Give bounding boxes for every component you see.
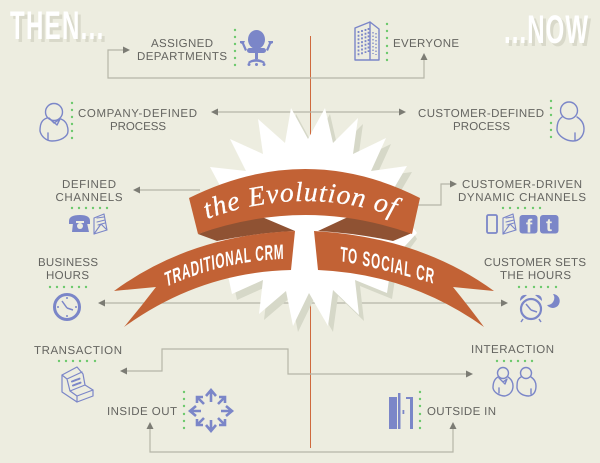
label: inside out: INSIDE OUT (107, 406, 177, 418)
dots (419, 391, 421, 429)
dots row (71, 207, 108, 209)
dots row (518, 286, 557, 288)
label: business hours: HOURS (46, 270, 89, 282)
arrow: defined channels (133, 186, 200, 194)
label: customer-driven dynamic channels: DYNAMIC CHANNELS (458, 192, 586, 204)
arrow: transaction to interaction (120, 349, 473, 378)
icon: facebook: f (526, 216, 533, 238)
starburst shadow (215, 114, 417, 332)
icon: cash register (62, 367, 93, 402)
icon: arrows outward (190, 390, 232, 431)
ribbon lower right (314, 231, 494, 327)
arrow: inside out to outside in (146, 422, 456, 452)
label: assigned departments: DEPARTMENTS (137, 51, 227, 63)
label: company-defined process: COMPANY-DEFINED (78, 108, 197, 120)
icon: facebook (520, 215, 538, 238)
ribbon text left: TRADITIONAL CRM (164, 244, 283, 286)
icon: two people (493, 368, 536, 396)
arrow: customer-driven channels (417, 180, 457, 205)
icon: open door (389, 393, 413, 429)
ribbon top (189, 169, 420, 234)
dots row (502, 207, 541, 209)
heading: now: ...NOW (507, 11, 592, 55)
dots (234, 29, 236, 66)
label: defined channels: CHANNELS (56, 192, 123, 204)
icon: twitter (540, 215, 558, 235)
label: interaction: INTERACTION (471, 344, 554, 356)
label: customer-defined process: CUSTOMER-DEFINED (418, 108, 544, 120)
heading: now: ...NOW (504, 8, 589, 52)
label: everyone: EVERYONE (393, 38, 459, 50)
label: customer-defined process: PROCESS (453, 121, 510, 133)
icon: customer person (557, 102, 584, 141)
heading: then: THEN... (13, 7, 108, 51)
label: outside in: OUTSIDE IN (427, 406, 496, 418)
dots row (49, 286, 87, 288)
label: transaction: TRANSACTION (34, 345, 122, 357)
arrow: assigned departments to everyone (108, 46, 428, 78)
arrow: business hours (98, 300, 508, 306)
label: defined channels: DEFINED (62, 179, 116, 191)
icon: telephone (69, 215, 90, 232)
label: business hours: BUSINESS (38, 257, 98, 269)
dots (183, 391, 185, 429)
heading: then: THEN... (10, 4, 105, 48)
dots (550, 100, 552, 138)
label: customer sets the hours: CUSTOMER SETS (484, 257, 586, 269)
icon: envelope with letter (94, 214, 107, 234)
icon: moon (547, 294, 560, 308)
center timeline (310, 36, 312, 448)
dots (386, 23, 388, 61)
dots row (58, 360, 96, 362)
ribbon lower left (114, 231, 295, 327)
title script text: the Evolution of (204, 182, 403, 220)
icon: clock (54, 294, 80, 320)
icon: company person (40, 104, 68, 141)
arrow: company to customer defined process (211, 108, 406, 116)
ribbon fold left (198, 217, 295, 241)
label: customer sets the hours: THE HOURS (500, 270, 571, 282)
starburst (210, 108, 417, 326)
icon: smartphone (487, 215, 497, 233)
label: company-defined process: PROCESS (110, 121, 166, 133)
icon: alarm clock (520, 295, 542, 322)
icon: envelope (503, 214, 516, 234)
label: assigned departments: ASSIGNED (151, 38, 213, 50)
icon: office building (355, 22, 379, 60)
ribbon fold right (318, 217, 412, 241)
icon: office chair (240, 30, 273, 66)
dots (71, 102, 73, 139)
ribbon title banner (114, 169, 494, 327)
dots row (496, 360, 533, 362)
label: customer-driven dynamic channels: CUSTOMER-DRIVEN (462, 179, 582, 191)
icon: twitter: t (546, 215, 552, 235)
